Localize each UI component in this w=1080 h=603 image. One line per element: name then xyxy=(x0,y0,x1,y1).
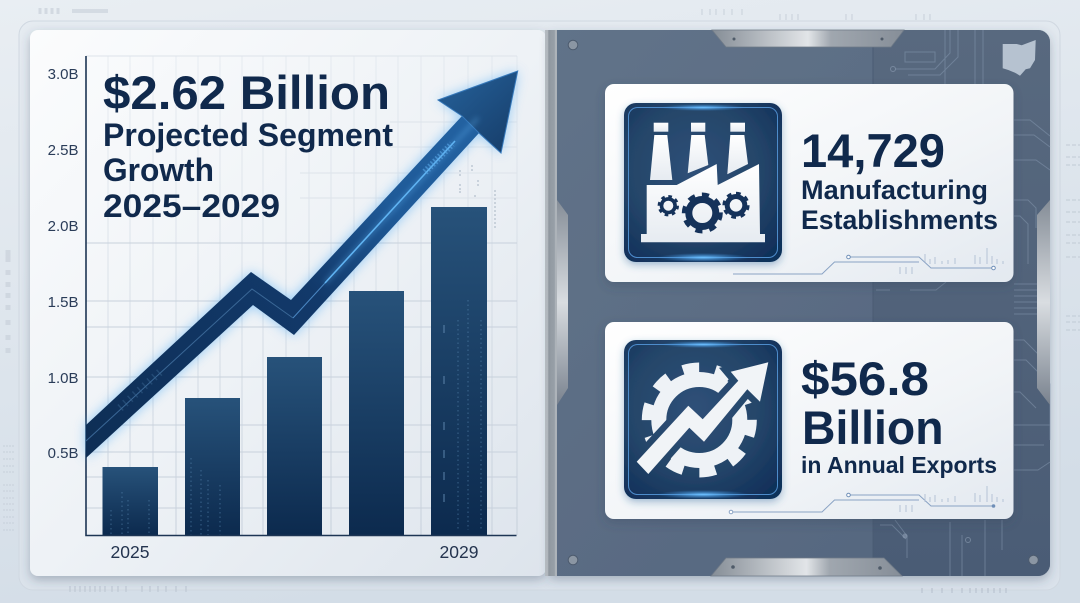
stat label: Establishments xyxy=(801,205,998,235)
headline: description: Projected Segment xyxy=(103,117,393,153)
x-axis labels xyxy=(111,542,478,562)
stat label xyxy=(801,175,998,235)
stat: $56.8 Billion xyxy=(801,352,944,454)
stat: $56.8 Billion: Billion xyxy=(802,401,944,454)
bar: 2026 xyxy=(185,398,240,535)
x-axis labels: 2029 xyxy=(440,542,478,562)
metal bracket: right xyxy=(1037,200,1050,405)
stat: 14,729: 14,729 xyxy=(801,124,945,177)
y-axis labels: 1.0B xyxy=(48,370,78,387)
circuit traces xyxy=(876,30,1050,576)
bar: 2029 xyxy=(431,207,487,535)
y-axis labels xyxy=(48,66,78,462)
y-axis labels: 3.0B xyxy=(48,66,78,83)
icon: factory with gears xyxy=(624,103,782,262)
card: annual exports xyxy=(605,322,1014,519)
card: manufacturing establishments xyxy=(605,84,1014,282)
stat: $56.8 Billion: $56.8 xyxy=(801,352,929,405)
y-axis labels: 0.5B xyxy=(48,445,78,462)
bar chart xyxy=(102,207,487,535)
y-axis labels: 2.5B xyxy=(48,142,78,159)
headline: description: 2025–2029 xyxy=(103,188,280,224)
chart axes xyxy=(86,56,516,536)
panel: dark metal backing xyxy=(545,30,1050,576)
icon: Ohio outline xyxy=(1003,40,1036,76)
bar: 2027 xyxy=(267,357,322,535)
headline: description: Growth xyxy=(103,152,214,188)
headline: description xyxy=(103,117,393,224)
y-axis labels: 2.0B xyxy=(48,218,78,235)
stat label: Manufacturing xyxy=(801,175,988,205)
x-axis labels: 2025 xyxy=(111,542,149,562)
chart gridlines xyxy=(86,56,517,535)
stat label: in Annual Exports xyxy=(801,452,997,478)
panel: growth chart xyxy=(30,30,546,576)
metal bracket: left xyxy=(557,200,568,405)
metal bracket: bottom xyxy=(711,558,902,576)
icon: gear with rising arrow xyxy=(624,340,782,499)
growth arrow xyxy=(86,71,518,458)
screws xyxy=(568,40,1038,565)
centre divider xyxy=(545,30,557,576)
bar: 2028 xyxy=(349,291,404,535)
y-axis labels: 1.5B xyxy=(48,294,78,311)
bar: 2025 xyxy=(102,467,158,535)
metal bracket: top xyxy=(712,30,904,47)
headline: value: $2.62 Billion xyxy=(103,66,390,119)
